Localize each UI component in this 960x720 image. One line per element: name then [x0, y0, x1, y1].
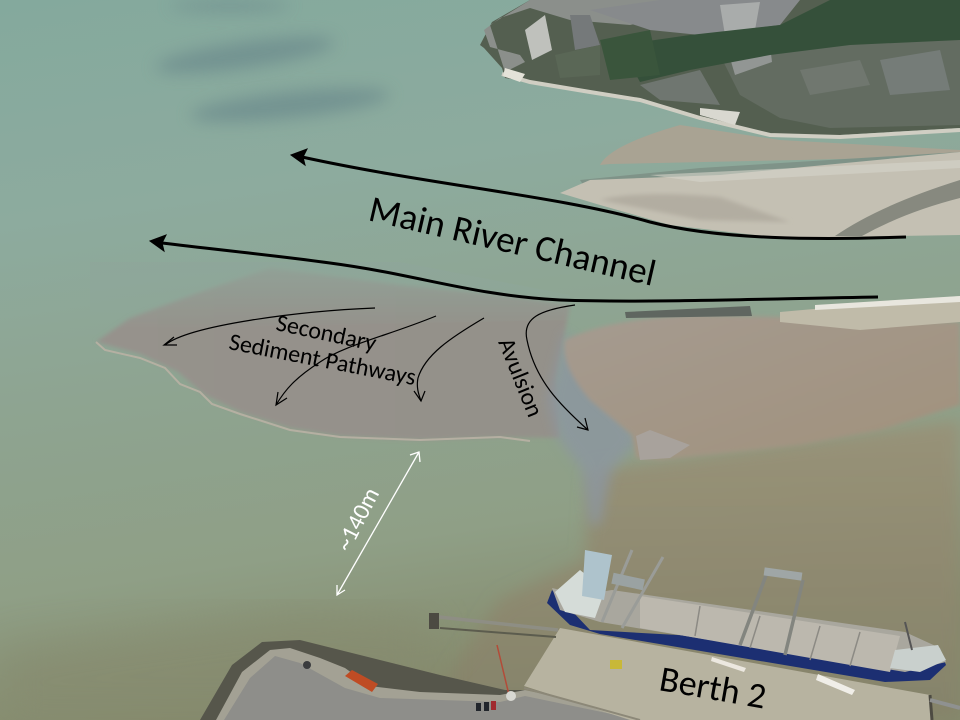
- port land: parking area and breakwater: [200, 640, 660, 720]
- label: Berth 2: Berth 2: [656, 657, 770, 718]
- width arrow: about 140 m: [337, 452, 420, 595]
- mudflat: secondary sediment lobe: [90, 262, 570, 441]
- arrow: upper main channel: [291, 149, 906, 238]
- upper sand bars: [560, 125, 960, 238]
- label: about 140m: ~140m: [329, 483, 386, 556]
- arrow: pathway one: [164, 308, 375, 345]
- main channel arrows: [150, 149, 906, 301]
- red equipment on lot: [345, 670, 378, 692]
- mudflat: right sand bar: [564, 296, 960, 460]
- label: Avulsion: Avulsion: [492, 334, 549, 421]
- label: Sediment Pathways: Sediment Pathways: [227, 327, 418, 392]
- cliff headland: [480, 0, 960, 137]
- secondary sediment pathway arrows: [164, 305, 588, 430]
- arrow: avulsion: [526, 305, 588, 430]
- channel plume and avulsion: [548, 330, 640, 525]
- trestle pier: [429, 613, 558, 637]
- port land: wharf concrete apron: [524, 628, 960, 720]
- arrow: lower main channel: [150, 235, 878, 301]
- label: Secondary: Secondary: [274, 308, 379, 358]
- arrow: pathway three: [414, 318, 484, 401]
- cloud shadows on water: [154, 1, 391, 128]
- docked cargo ship: [547, 550, 946, 682]
- label: Main River Channel: Main River Channel: [365, 186, 660, 296]
- arrow: pathway two: [276, 316, 436, 405]
